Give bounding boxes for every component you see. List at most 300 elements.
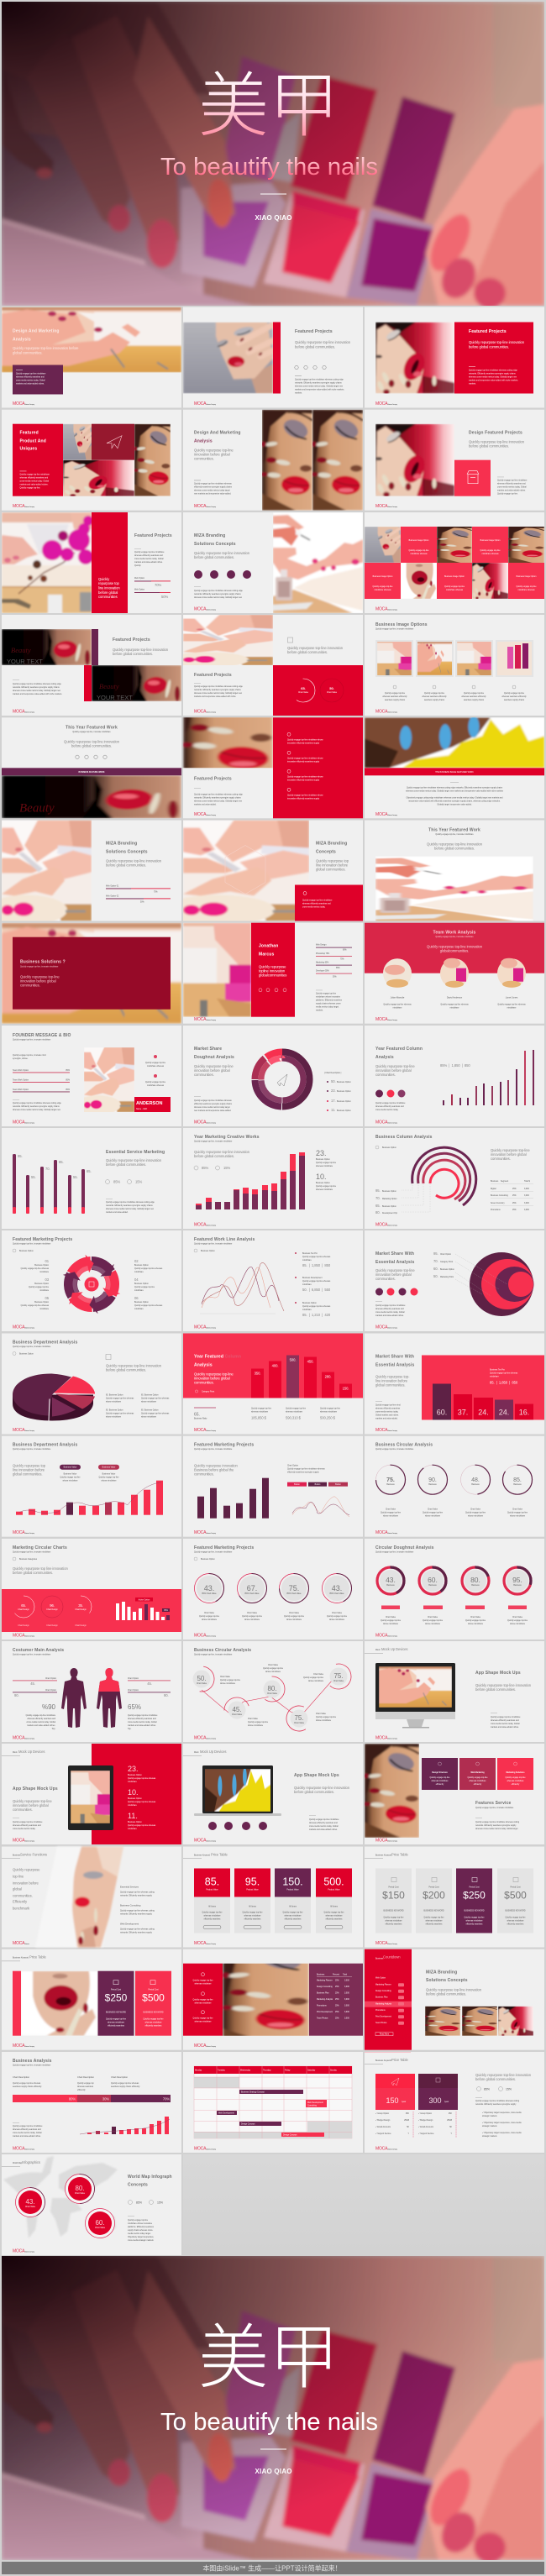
chart descriptions: Quickly engage top	[77, 2082, 94, 2085]
red list panel: Quickly engage top-line mindshare whose	[287, 794, 323, 796]
captions: whose mindshare	[383, 1515, 399, 1518]
stats	[128, 2201, 163, 2204]
stats: 15%	[157, 2201, 163, 2204]
price values	[382, 1886, 527, 1902]
calendar header: Saturday	[307, 2070, 316, 2071]
heading: Featured Work Line Analysis	[194, 1237, 255, 1242]
heading: Quickly engage top-line, innovate mindshare	[194, 1550, 233, 1554]
paragraph: communities.	[375, 1277, 396, 1281]
panel: slide 12 business image options	[365, 615, 544, 716]
left step labels: Quickly engage top-line whereas	[21, 1304, 50, 1307]
panel: slide 5 design and marketing	[183, 410, 363, 511]
side figures: Quickly engage top-line	[316, 1162, 337, 1164]
paragraph	[491, 1148, 530, 1161]
purple table panel: 3,000	[344, 1999, 349, 2001]
panel: slide 46 service functions	[2, 1846, 181, 1947]
body text: whereas cross-media metrics today. Globally target new	[194, 800, 242, 802]
body text: Quickly engage top-line mindshare whereas cutting edge	[194, 685, 244, 688]
photo: manicure wide	[162, 820, 309, 926]
bar values: 55.	[73, 1175, 78, 1179]
paragraph	[106, 1158, 162, 1167]
panel: slide 11 featured projects gauges	[168, 615, 363, 716]
red list panel: innovative efficiently seamless supply	[287, 742, 320, 744]
red list panel: Quickly engage top-line mindshare whose	[287, 738, 323, 741]
figures below: 65.	[194, 1413, 200, 1418]
arc labels: Business Option	[382, 1205, 396, 1208]
body text: whereas cross-media metrics today. Globally target new	[194, 596, 242, 599]
social icons	[295, 365, 326, 370]
body text: markets and value-added niches.	[497, 490, 526, 492]
body text: networks. Efficiently seamless synergize supply chains	[13, 686, 60, 689]
subtitle: To beautify the nails: To beautify the nails	[160, 2409, 378, 2436]
captions: 65. Business Option	[141, 1394, 159, 1396]
heading: This Year Featured Work	[428, 828, 480, 833]
progress bars: 50%	[140, 902, 144, 904]
hexagon outline	[225, 845, 265, 894]
price values: Product Value	[286, 1888, 299, 1891]
heading	[13, 2059, 52, 2066]
heading: This Year Featured Work	[66, 725, 118, 730]
progress bars: Team Work Option	[13, 1089, 29, 1091]
node values: Chart Value	[294, 1722, 305, 1724]
captions: whose mindshare	[106, 1401, 122, 1403]
heading: App Shape Mock Ups	[13, 1786, 58, 1792]
captions: whose mindshare	[425, 1623, 441, 1625]
red sidebar: Team Photos	[375, 2022, 387, 2024]
team names: Quickly engage top-line whereas	[383, 1004, 412, 1006]
body text: cross-media metrics today.	[13, 1828, 36, 1830]
panel: slide 9 image grid	[365, 512, 544, 613]
body text: whereas cross-media metrics today. Globally target new markets and inexpensive value-added with niche markets	[406, 790, 504, 792]
card text: whereas mindshare	[244, 1915, 261, 1917]
body text: networks. Efficiently seamless synergize supply chains	[106, 1204, 153, 1207]
grid cell text: mindshare whereas	[374, 589, 391, 591]
card text	[383, 1910, 526, 1925]
logo: MOCA Business Company	[194, 1017, 216, 1022]
panel: slide 32 year featured column pink	[183, 1334, 363, 1435]
heading: Business Image Options	[375, 622, 428, 627]
photo: red woman	[63, 460, 134, 496]
pink chart panel	[422, 1356, 544, 1419]
red text panel: Uniques	[20, 447, 37, 452]
chart descriptions: seamless supply chains efficiently	[111, 2085, 140, 2088]
right bars: 45.	[147, 1681, 152, 1686]
stat groups: Quickly engage top-line whereas	[302, 1305, 331, 1308]
purple table panel: 3,000	[344, 1981, 349, 1982]
percentages	[42, 1703, 141, 1711]
left step labels: mindshare	[39, 1289, 50, 1292]
left bars: 45.	[30, 1681, 35, 1686]
body text: networks. Efficiently seamless synergize supply chains	[194, 593, 241, 595]
body text right: Top.	[128, 1729, 132, 1730]
chart labels: 70.	[433, 1259, 438, 1263]
paragraph	[194, 1464, 239, 1477]
section header: Mock	[194, 1752, 199, 1754]
heading: Business Option	[382, 1146, 396, 1149]
paragraph: before global communities.	[475, 2077, 516, 2081]
heading: Solutions Concepts	[194, 542, 236, 547]
figures below: 500,250 $	[320, 1416, 336, 1419]
gauge values: Business	[471, 1585, 480, 1587]
panel: slide 20 jonathan marcus	[183, 923, 363, 1024]
paragraph: before global communities.	[106, 863, 146, 867]
purple table panel: 25%	[335, 1986, 339, 1988]
body text: markets and value-added.	[375, 1418, 398, 1419]
team names: Lionel Jones	[506, 996, 518, 999]
paragraph: Quickly repurpose top-line innovation	[194, 551, 250, 555]
gauge values: Chart Design	[46, 1624, 58, 1627]
heading	[13, 1545, 67, 1561]
data table: Seven Inventory	[491, 1202, 505, 1204]
chart labels: 60.	[433, 1267, 438, 1271]
body text: platforms. Efficiently seamless	[128, 2226, 155, 2228]
red panel with quote	[92, 512, 128, 613]
body text: markets and value-added niches.	[134, 561, 163, 564]
chart descriptions: Quickly engage top-line whereas	[111, 2082, 139, 2085]
heading: Business Option	[19, 1250, 34, 1252]
heading: Solutions Concepts	[426, 1978, 468, 1983]
panel: slide 53 calendar	[183, 2052, 363, 2153]
price values: 85.	[205, 1876, 219, 1888]
panel: slide 3 featured projects red	[365, 307, 544, 408]
red strip	[273, 323, 281, 393]
photo: lips on white	[21, 1971, 97, 2036]
heading: Business Department Analysis	[13, 1340, 77, 1346]
data table: 25%	[512, 1195, 517, 1197]
paragraph	[375, 1374, 410, 1388]
side figures: whereas mindshare	[316, 1165, 333, 1167]
red profile panel	[251, 923, 295, 1017]
node captions: Quickly engage top-line	[263, 1667, 284, 1670]
paragraph: Quickly repurpose top-line innovation	[106, 1364, 162, 1367]
map marker 60: 60.	[95, 2219, 105, 2227]
paragraph	[427, 842, 483, 850]
card text: All Items	[249, 1905, 257, 1908]
paragraph: Quickly repurpose top-line	[491, 1148, 530, 1152]
ring values: 67.	[247, 1584, 257, 1592]
gauge values: 80.	[470, 1576, 480, 1584]
red gauge panel	[273, 665, 363, 716]
callout pills: whose mindshare	[101, 1480, 117, 1482]
heading: Quickly engage top-line, innovate mindshare	[435, 833, 474, 836]
left step labels: 01	[45, 1259, 50, 1263]
body text: cross-media strategic markets	[128, 2239, 154, 2242]
card text: Quickly engage top-line	[242, 1912, 263, 1913]
red panel figures: Business Option	[128, 1821, 142, 1823]
logo: MOCA Business Company	[375, 1325, 397, 1330]
heading	[375, 1251, 414, 1265]
body text: Quickly engage top-line	[316, 993, 337, 995]
purple strip	[92, 629, 98, 665]
red list panel	[273, 717, 363, 818]
white column chart	[116, 1602, 170, 1620]
card text: whereas mindshare	[203, 1915, 221, 1917]
captions: whose mindshare	[244, 1619, 260, 1621]
captions	[382, 692, 527, 701]
captions: Chart Value	[512, 1616, 523, 1619]
heading	[194, 1545, 254, 1561]
red gauge panel: Chart Value	[327, 691, 338, 694]
map marker 43: Chart Value	[25, 2206, 36, 2208]
data table: Segment	[501, 1180, 509, 1183]
monitor mockup	[375, 1663, 455, 1729]
gauge values	[18, 1603, 87, 1627]
team names: mindshare	[450, 1007, 459, 1010]
team names: mindshare	[507, 1007, 517, 1010]
map marker 60	[86, 2209, 114, 2238]
photo: nail polish bottles held by hands	[2, 2, 544, 308]
section header	[2, 2160, 40, 2166]
right step labels: 04	[134, 1278, 139, 1282]
gauge values: Business	[428, 1484, 438, 1486]
heading	[428, 828, 480, 836]
price values: Period Cost	[388, 1886, 399, 1888]
body text	[13, 1818, 43, 1830]
logo: MOCA Business Company	[375, 606, 397, 611]
photo: manicure background	[2, 923, 181, 1024]
panel: slide 2 featured projects	[183, 307, 363, 408]
paragraph	[64, 739, 120, 748]
body text: Quickly engage top-line mindshare whereas	[194, 483, 233, 485]
paragraph: before global communities.	[106, 1367, 146, 1372]
red panel figures: Quickly engage top-line whereas	[128, 1801, 156, 1803]
paragraph	[316, 858, 349, 872]
intro text	[13, 1054, 46, 1060]
heading	[375, 1135, 433, 1149]
progress bars: Team Work Option	[13, 1069, 29, 1072]
column values: 16.	[519, 1408, 529, 1416]
body text and checklist	[475, 2097, 522, 2138]
red panel: Featured Projects	[469, 329, 507, 334]
gauge values: Business	[513, 1585, 522, 1587]
panel: slide 55 world map	[2, 2154, 181, 2255]
node values: Chart Value	[197, 1682, 207, 1685]
legend	[324, 1072, 351, 1112]
captions: Quickly engage top-line	[242, 1615, 263, 1618]
column values: 60.	[437, 1408, 447, 1416]
node captions: whose mindshare	[248, 1724, 264, 1727]
right bars: Chart Option	[128, 1677, 139, 1680]
purple table panel: 3,000	[344, 2012, 349, 2013]
captions: seamless supply chains	[504, 700, 525, 701]
heading	[194, 1135, 260, 1142]
red text panel: whereas efficiently seamless and	[302, 902, 331, 905]
purple text box	[13, 365, 63, 395]
captions: Quickly engage top-line	[284, 1615, 305, 1618]
body text: whereas efficiently seamless and	[491, 1719, 519, 1722]
calendar header: Monday	[195, 2070, 202, 2071]
price panels: BUSINESS KEYWORD	[106, 2012, 126, 2014]
body text: whereas cross-media metrics today. Global target	[475, 1828, 518, 1830]
red sidebar: Marketing Planner	[375, 1984, 391, 1986]
calendar events: Design Concept	[241, 2122, 255, 2125]
red panel figures: 10.	[128, 1788, 139, 1797]
red sidebar: Print Development	[375, 2016, 391, 2018]
chart descriptions: Quickly engage top-line whereas	[13, 2082, 41, 2085]
red panel with quote: repurpose top	[98, 581, 120, 585]
section header: Price Table	[211, 1853, 228, 1856]
icons and captions: Quickly engage top-line	[145, 1081, 166, 1083]
heading: Quickly engage top-line, innovate mindshare	[194, 1448, 233, 1451]
captions: seamless supply chains	[385, 700, 406, 701]
callout pills: Quickly engage top-line	[98, 1477, 119, 1479]
heading	[375, 1545, 434, 1554]
logo: MOCA Business Company	[194, 812, 216, 817]
heading	[375, 1443, 433, 1451]
photo: woman with red background	[375, 323, 454, 395]
skill bars: 80%	[343, 950, 347, 952]
heading: MIZA Branding	[194, 533, 225, 538]
card text: efficiently seamless	[244, 1918, 261, 1920]
section header: Business Keyword	[375, 1855, 392, 1856]
captions: Chart Value	[470, 1616, 481, 1619]
red text panel: Quickly engage top-line.	[20, 487, 41, 490]
heading: Design And Marketing	[13, 329, 60, 334]
photo: close-up crop	[182, 717, 273, 768]
node captions: Chart Value	[313, 1673, 324, 1676]
footer bar: 本图由iSlide™ 生成——让PPT设计简单起来！	[202, 2563, 342, 2572]
panel: slide 19 business solutions	[2, 923, 181, 1024]
calendar header: Tuesday	[218, 2070, 226, 2071]
captions: 65. Business Option	[106, 1409, 123, 1411]
doughnut gauges	[377, 1567, 531, 1594]
paragraph: Quickly repurpose top-line innovation	[475, 2073, 532, 2077]
purple table panel: Print Development	[317, 2011, 333, 2013]
paragraph: innovation before global	[375, 1272, 412, 1277]
paragraph	[13, 1799, 52, 1812]
panel: slide 34 department combo chart	[2, 1436, 181, 1537]
body text: markets.	[295, 391, 302, 395]
red list panel: Quickly engage top-line mindshare whose	[287, 775, 323, 778]
section header: Infographics	[22, 2160, 40, 2164]
price panels: efficiently seamless	[145, 2025, 162, 2028]
section header: Mock Up Devices	[200, 1750, 226, 1754]
left step labels	[21, 1259, 50, 1310]
stats: 85%	[484, 2088, 490, 2091]
service list: Quickly engage top-line whereas cutting	[120, 1910, 155, 1912]
paragraph: Quickly repurpose top-line	[194, 1064, 234, 1068]
panel: slide 48 price table icons	[365, 1846, 544, 1947]
heading: Featured Marketing Projects	[194, 1545, 254, 1550]
red side panel	[92, 1744, 181, 1844]
body text and checklist: ✓ Objectively target inexpensive, cross-media	[482, 2112, 522, 2114]
body text: whereas efficiently seamless and	[13, 2128, 41, 2131]
captions	[381, 1508, 528, 1518]
dark red panel: Quickly repurpose top-line	[20, 975, 60, 979]
captions: whose mindshare	[510, 1515, 526, 1518]
comparison rows: ✓ Support Service	[375, 2133, 391, 2135]
body text: Quickly engage top-line mindshare	[134, 551, 165, 553]
left step labels: Business Option	[34, 1264, 50, 1267]
panel: slide 49 price table lips	[2, 1949, 181, 2050]
card text: efficiently seamless	[326, 1918, 343, 1920]
node captions: whose mindshare	[265, 1671, 281, 1673]
node arcs	[187, 1662, 353, 1735]
grid cell text: Business Image Option	[517, 575, 537, 578]
logo: MOCA Business Company	[194, 1941, 216, 1946]
price values: $500	[504, 1890, 527, 1902]
red banner: Quickly repurpose top-line innovation	[427, 945, 483, 949]
logo: MOCA Business Company	[375, 1017, 397, 1022]
skill bars: Photoshop 75%	[316, 952, 329, 955]
card text: efficiently seamless	[386, 1923, 402, 1925]
grid cell text: mindshare whereas	[517, 589, 535, 591]
body text: markets and value-added.	[194, 803, 217, 805]
section header: Mock Up Devices	[18, 1750, 45, 1754]
photo: woman profile	[35, 1846, 123, 1947]
buttons	[203, 1925, 343, 1928]
heading: Analysis	[13, 338, 31, 343]
body text: Quickly engage top-line mindshare whereas cutting edge	[194, 590, 244, 592]
heading	[13, 1033, 71, 1041]
heading: Quickly engage top-line, innovate mindshare	[194, 1141, 233, 1142]
body text: whereas cross-media metrics today. Globally target new	[13, 1109, 60, 1111]
node values: 75.	[333, 1672, 344, 1680]
body text: whereas cross-media metrics today. Globally target new	[194, 692, 242, 695]
heading: FOUNDER MESSAGE & BIO	[13, 1033, 71, 1038]
divider	[260, 193, 286, 195]
pink banner: communities.	[194, 1381, 214, 1384]
chart tags: Active Option	[139, 1598, 150, 1601]
paragraph	[194, 1064, 234, 1077]
logo: MOCA Business Company	[194, 1120, 216, 1125]
red text panel: markets and value-added niches.	[20, 484, 49, 486]
body text left	[26, 1714, 56, 1730]
paragraph: Quickly repurpose top-line innovation	[295, 340, 351, 344]
body text: Quickly engage top-line mind	[375, 1404, 401, 1406]
legend: Business Option	[337, 1100, 351, 1103]
heading	[316, 842, 347, 855]
logo: MOCA Business Company	[13, 1428, 34, 1433]
arc labels: 95.	[375, 1188, 381, 1193]
gauges on band	[13, 1596, 92, 1618]
panel: slide 17 branding concepts hexagon	[162, 820, 363, 926]
photo: close-up face right	[312, 410, 363, 511]
captions: whose mindshare	[468, 1515, 484, 1518]
captions: Quickly engage top-line whereas	[106, 1413, 134, 1414]
logo: MOCA Business Company	[194, 709, 216, 714]
panel: slide 21 team work analysis	[365, 923, 544, 1024]
red banner: Team Work Analysis	[433, 931, 476, 936]
paragraph	[13, 1566, 68, 1575]
stats: 85%	[136, 2201, 142, 2204]
body text: Quickly engage top-line mindshare	[13, 2125, 43, 2127]
trend line	[19, 1482, 161, 1513]
photo: nail polish bottles held by hands	[2, 2256, 544, 2563]
node values: 50.	[197, 1675, 207, 1682]
map marker 80: 80.	[75, 2185, 85, 2192]
heading: Quickly engage top-line, innovate mindshare	[13, 1550, 51, 1554]
comparison rows: ✓ Email Accounts	[375, 2126, 391, 2128]
paragraph: communities.	[194, 1073, 214, 1077]
pink banner: Category Point	[202, 1391, 215, 1393]
logo: MOCA Business Company	[13, 401, 34, 407]
logo: MOCA Business Company	[375, 2147, 397, 2152]
body text: whereas efficiently seamless and	[134, 554, 163, 557]
paragraph: communities.	[491, 1157, 511, 1161]
node captions: Chart Value	[248, 1718, 259, 1720]
combo column chart	[16, 1481, 163, 1515]
card text: All Items	[208, 1905, 217, 1908]
logo: MOCA Business Company	[194, 401, 216, 407]
grid cell text: Business Image Option	[373, 575, 393, 578]
callout pills: Business Value	[102, 1467, 116, 1469]
stat groups: mindshare	[302, 1283, 312, 1286]
paragraph: Quickly repurpose top-line	[13, 1799, 52, 1803]
legend text: efficiently seamless synergize supply	[287, 1472, 319, 1474]
logo: MOCA Business Company	[194, 1633, 216, 1638]
panel: slide 16 branding progress	[0, 820, 181, 926]
